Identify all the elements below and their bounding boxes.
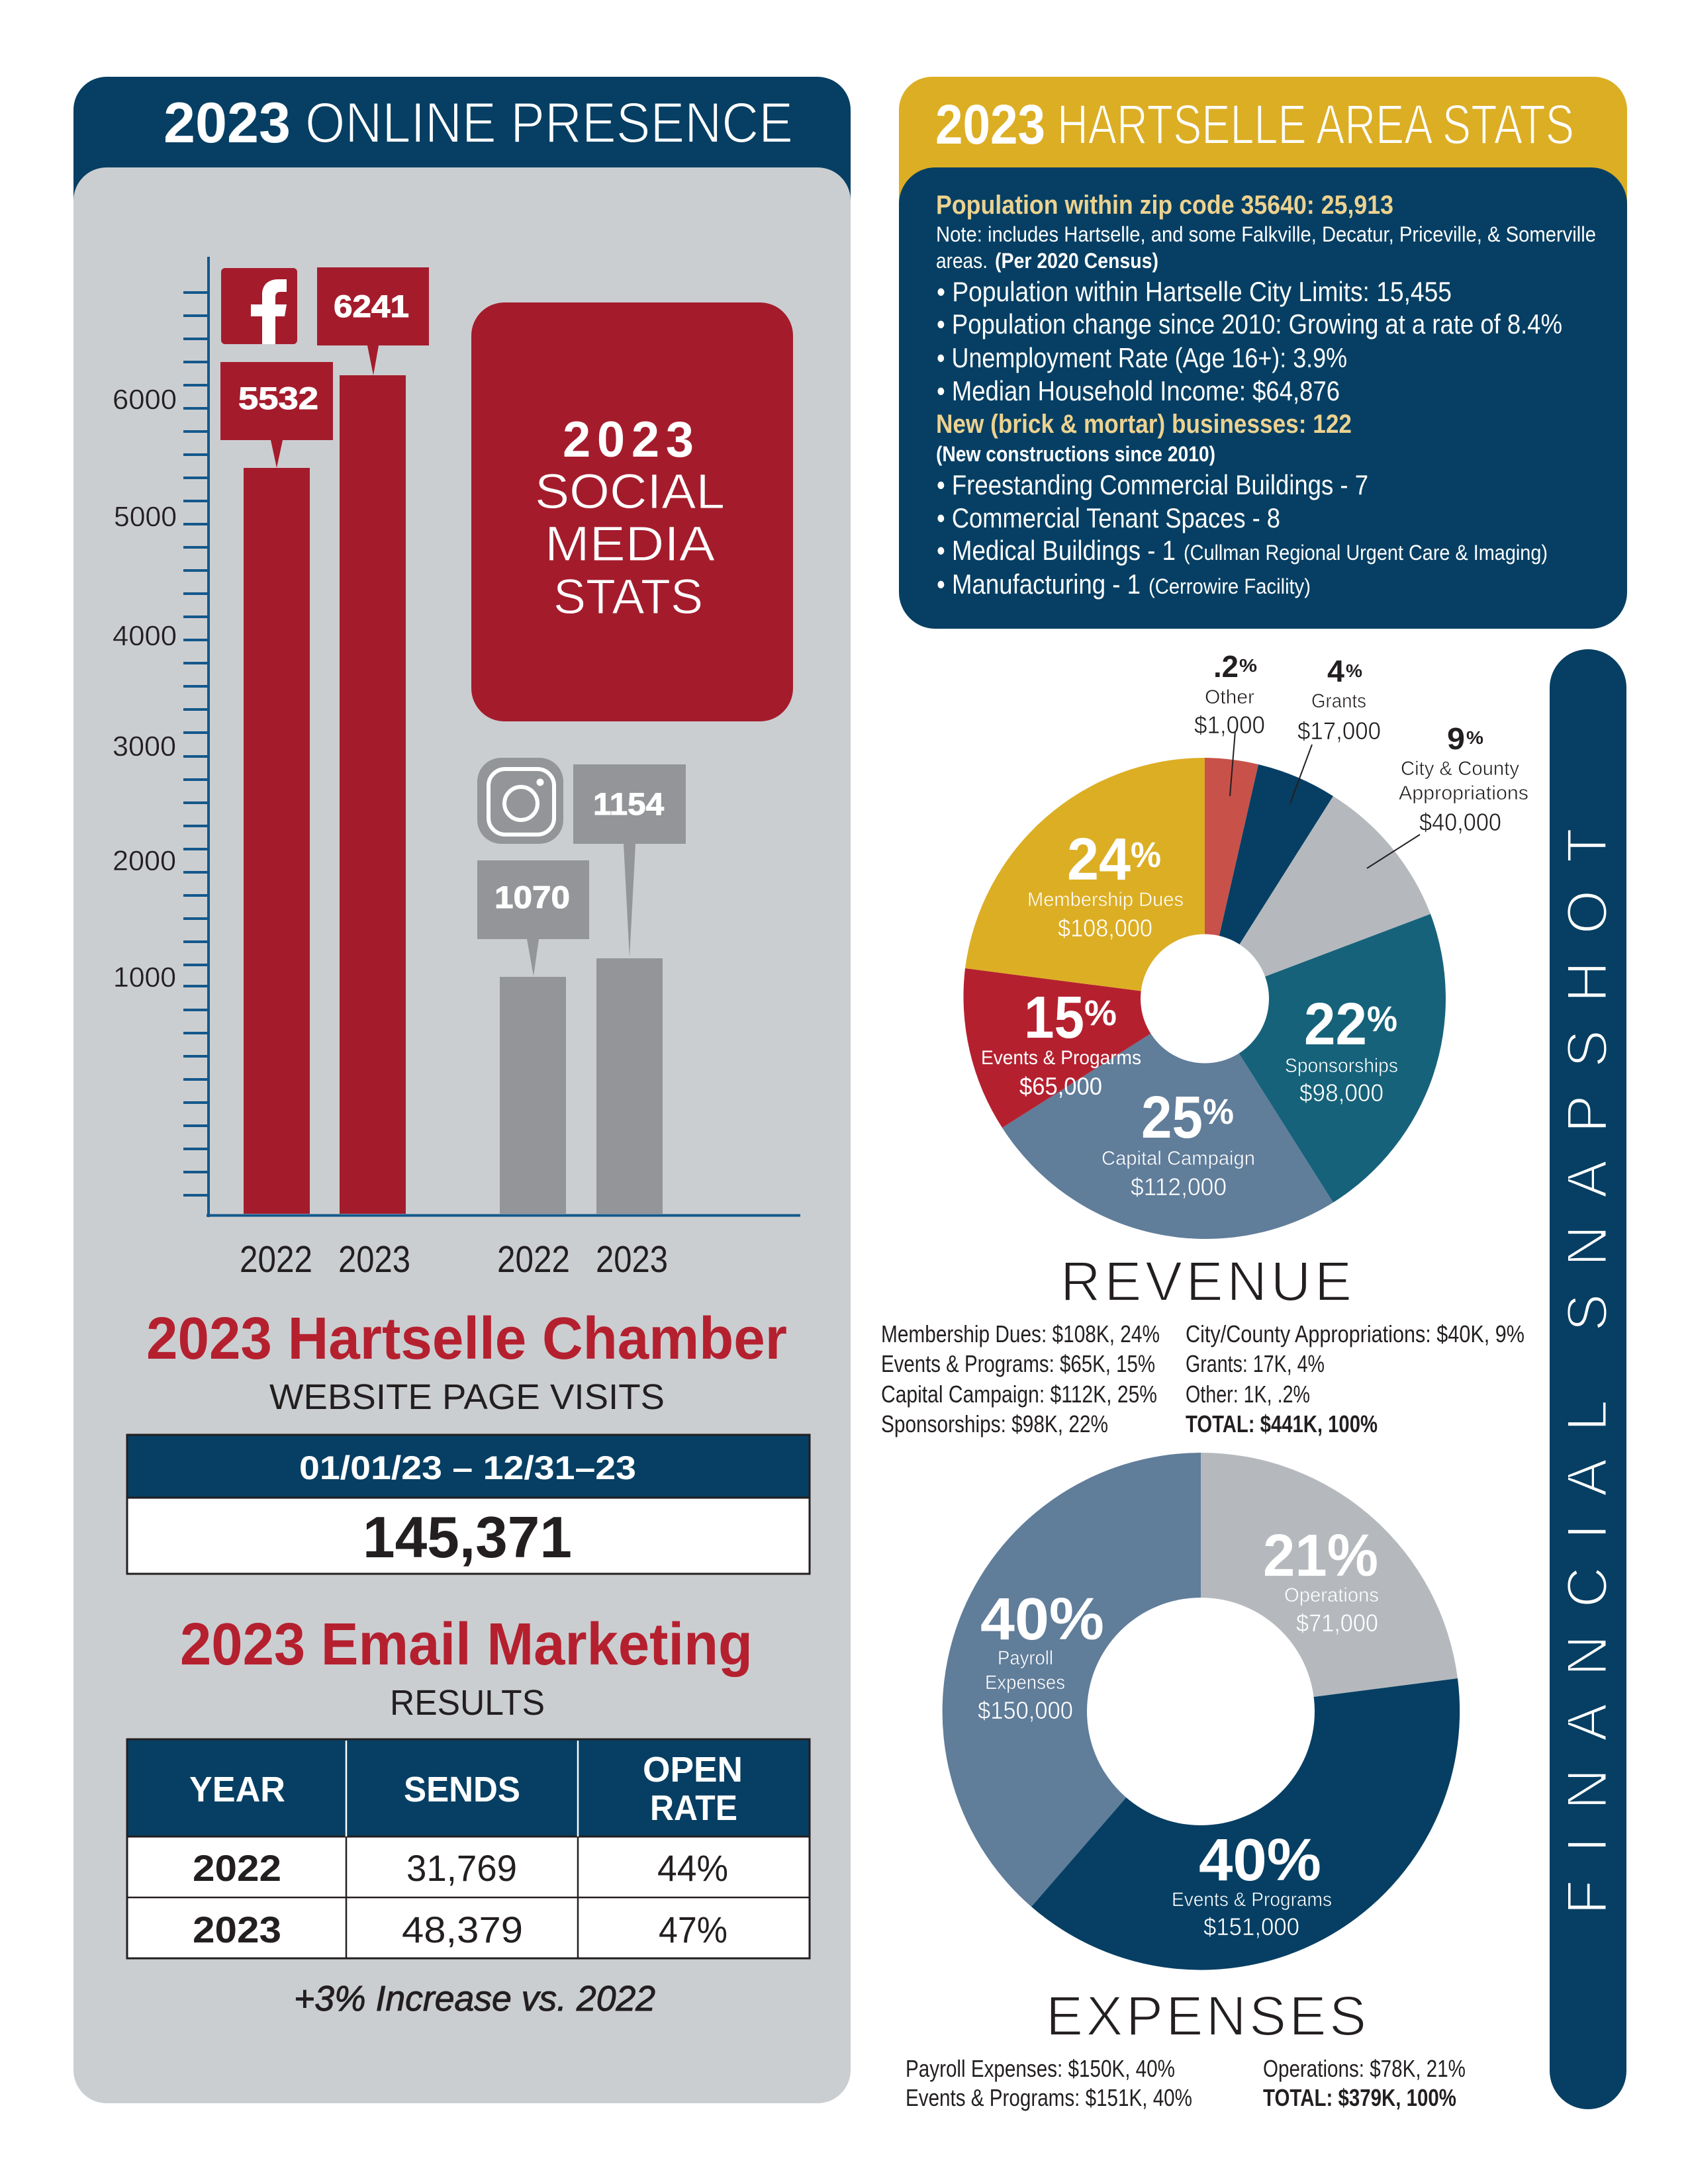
panel: hartselle area stats <box>899 77 1627 629</box>
legend: revenue: Events & Programs: $65K, 15% <box>881 1350 1155 1377</box>
title: area stats <box>935 93 1574 156</box>
title: online presence: 2023 <box>164 91 291 155</box>
legend: revenue: Membership Dues: $108K, 24% <box>881 1320 1160 1347</box>
table: email marketing results: SENDS <box>404 1770 520 1809</box>
label: events and programs: % <box>1084 993 1117 1033</box>
heading: email marketing: 2023 Email Marketing <box>180 1612 753 1678</box>
legend: expenses: Events & Programs: $151K, 40% <box>906 2084 1192 2111</box>
label: other <box>1194 649 1265 796</box>
legend: revenue: Other: 1K, .2% <box>1186 1381 1310 1408</box>
callout box: 2023 social media stats <box>471 302 793 721</box>
axis labels: 3000 <box>113 731 176 762</box>
label: capital campaign: Capital Campaign <box>1102 1148 1255 1169</box>
axis labels: 6000 <box>113 384 177 416</box>
label: capital campaign: $112,000 <box>1131 1173 1227 1201</box>
heading: website page visits <box>146 1306 787 1417</box>
label: membership dues: 24 <box>1067 827 1131 893</box>
heading: revenue: REVENUE <box>1060 1250 1352 1312</box>
text block: new businesses: • Commercial Tenant Spaces - 8 <box>937 502 1280 533</box>
callout: facebook 2023 value: 6241 <box>334 289 409 324</box>
x-axis year labels <box>240 1238 668 1281</box>
text block: population stats: • Unemployment Rate (Age 16+): 3.9% <box>937 342 1347 373</box>
heading: website page visits: 2023 Hartselle Chamber <box>146 1306 787 1372</box>
axis labels: 5000 <box>114 501 177 533</box>
label: city and county appropriations: % <box>1466 727 1483 748</box>
table: email marketing results: 2022 <box>193 1847 281 1889</box>
text block: population stats: • Population change since 2010: Growing at a rate of 8.4% <box>937 308 1562 340</box>
heading: website page visits: WEBSITE PAGE VISITS <box>269 1377 665 1417</box>
legend: revenue: Grants: 17K, 4% <box>1186 1350 1325 1377</box>
label: payroll expenses: 40% <box>980 1586 1104 1653</box>
label: sponsorships: 22 <box>1304 991 1367 1058</box>
label: grants <box>1290 654 1381 803</box>
slice: membership dues <box>965 758 1205 999</box>
callout box: 2023 social media stats: MEDIA <box>545 516 716 571</box>
panel background: online presence <box>73 167 851 2103</box>
icon: instagram <box>477 758 563 844</box>
text block: population stats <box>936 191 1596 406</box>
text block: new businesses: • Medical Buildings - 1 <box>937 535 1176 566</box>
heading: email marketing <box>180 1612 753 1723</box>
label: sponsorships <box>1285 991 1398 1107</box>
icon: facebook <box>221 268 297 344</box>
callout: facebook 2023 value <box>317 267 429 375</box>
title: area stats: 2023 <box>935 93 1045 156</box>
title: online presence: ONLINE PRESENCE <box>305 91 793 155</box>
label: other: % <box>1239 655 1257 676</box>
table: email marketing results: 2023 <box>193 1909 281 1950</box>
label: operations: Operations <box>1284 1584 1379 1606</box>
label: city and county appropriations: $40,000 <box>1419 809 1501 836</box>
label: sponsorships: % <box>1367 999 1397 1039</box>
legend: revenue <box>881 1320 1524 1437</box>
callout: instagram 2023 value: 1154 <box>593 786 664 821</box>
text block: population stats: Population within zip code 35640: 25,913 <box>936 191 1393 220</box>
table: email marketing results: RATE <box>650 1788 737 1828</box>
label: city and county appropriations <box>1367 721 1528 868</box>
text block: new businesses: New (brick & mortar) businesses: 122 <box>936 410 1352 439</box>
legend: expenses: TOTAL: $379K, 100% <box>1263 2084 1456 2111</box>
label: payroll expenses: $150,000 <box>978 1697 1073 1724</box>
chart axes and ticks <box>183 257 800 1217</box>
slice: grants <box>1205 764 1333 999</box>
text block: population stats: areas. <box>936 249 988 273</box>
bar: instagram 2023 <box>596 958 663 1214</box>
label: payroll expenses: Expenses <box>985 1672 1065 1694</box>
panel: financial snapshot side tab <box>1550 649 1626 2109</box>
callout: instagram 2022 value <box>477 860 589 976</box>
text block: new businesses: • Manufacturing - 1 <box>937 569 1141 600</box>
label: operations: 21% <box>1263 1523 1378 1589</box>
label: sponsorships: $98,000 <box>1299 1079 1383 1107</box>
table: website visits: 01/01/23 – 12/31–23 <box>299 1449 636 1486</box>
slice: city and county appropriations <box>1205 796 1430 999</box>
label: grants: $17,000 <box>1297 717 1381 745</box>
legend: revenue: TOTAL: $441K, 100% <box>1186 1410 1378 1437</box>
label: other: $1,000 <box>1194 711 1265 739</box>
slice: payroll expenses <box>943 1453 1201 1907</box>
text block: new businesses: (Cerrowire Facility) <box>1149 574 1311 598</box>
x-axis year labels: 2023 <box>338 1238 410 1281</box>
label: capital campaign: % <box>1203 1092 1234 1132</box>
axis labels: 2000 <box>113 845 176 877</box>
label: operations: $71,000 <box>1296 1610 1378 1637</box>
label: events and programs expense: Events & Programs <box>1172 1889 1332 1911</box>
callout box: 2023 social media stats: 2023 <box>563 412 694 468</box>
text block: new businesses: (New constructions since 2010) <box>936 442 1215 466</box>
slice: events and programs expense <box>1031 1678 1460 1970</box>
slice: other <box>1205 758 1258 999</box>
table: email marketing results: 48,379 <box>402 1909 523 1950</box>
table: website visits: 145,371 <box>363 1504 572 1570</box>
bar: facebook 2022 <box>244 468 310 1214</box>
label: membership dues: Membership Dues <box>1027 889 1184 911</box>
header band: area stats <box>899 77 1627 275</box>
label: operations <box>1263 1523 1379 1637</box>
label: payroll expenses: Payroll <box>998 1647 1053 1669</box>
heading: expenses: EXPENSES <box>1046 1985 1366 2047</box>
slice: sponsorships <box>1205 914 1446 1203</box>
label: events and programs: $65,000 <box>1019 1073 1102 1100</box>
text block: new businesses: (Cullman Regional Urgent Care & Imaging) <box>1184 541 1548 565</box>
label: city and county appropriations: Appropriations <box>1399 782 1528 804</box>
slice: events and programs <box>963 968 1205 1128</box>
legend: revenue: Capital Campaign: $112K, 25% <box>881 1381 1157 1408</box>
label: membership dues: $108,000 <box>1058 915 1152 942</box>
legend: expenses: Payroll Expenses: $150K, 40% <box>906 2055 1175 2082</box>
donut chart: expenses <box>943 1453 1460 1970</box>
table: email marketing results: OPEN <box>643 1750 743 1790</box>
axis labels: 4000 <box>113 620 177 652</box>
label: grants: Grants <box>1311 690 1366 712</box>
text block: population stats: Note: includes Hartselle, and some Falkville, Decatur, Priceville, & Somerville <box>936 222 1596 246</box>
x-axis year labels: 2023 <box>596 1238 668 1281</box>
bar: facebook 2023 <box>340 375 406 1214</box>
label: grants: % <box>1346 660 1362 681</box>
panel: financial snapshot side tab: FINANCIAL SNAPSHOT <box>1556 828 1619 1915</box>
label: capital campaign <box>1102 1085 1255 1201</box>
label: events and programs <box>981 985 1141 1100</box>
heading: email marketing: RESULTS <box>390 1683 545 1723</box>
pie chart: revenue <box>963 649 1528 1239</box>
table: email marketing results: 31,769 <box>406 1847 517 1889</box>
table: email marketing results: 44% <box>657 1847 728 1889</box>
text block: new businesses <box>936 410 1548 600</box>
table: email marketing results: YEAR <box>189 1770 285 1809</box>
bar: instagram 2022 <box>500 977 566 1214</box>
label: membership dues: % <box>1131 835 1161 875</box>
note: increase versus 2022: +3% Increase vs. 2022 <box>294 1979 655 2019</box>
label: grants: 4 <box>1327 654 1344 688</box>
table: email marketing results: 47% <box>659 1909 727 1950</box>
text block: population stats: (Per 2020 Census) <box>995 249 1158 273</box>
label: capital campaign: 25 <box>1141 1085 1203 1151</box>
label: events and programs expense: $151,000 <box>1203 1913 1299 1940</box>
x-axis year labels: 2022 <box>497 1238 570 1281</box>
label: events and programs expense <box>1172 1827 1332 1940</box>
legend: revenue: Sponsorships: $98K, 22% <box>881 1410 1108 1437</box>
label: membership dues <box>1027 827 1184 942</box>
label: city and county appropriations: 9 <box>1447 721 1465 756</box>
panel background: area stats <box>899 167 1627 629</box>
legend: expenses: Operations: $78K, 21% <box>1263 2055 1466 2082</box>
callout box: 2023 social media stats: STATS <box>553 569 703 624</box>
callout: instagram 2022 value: 1070 <box>494 880 570 915</box>
panel: online presence <box>73 77 851 2103</box>
legend: expenses <box>906 2055 1466 2111</box>
legend: revenue: City/County Appropriations: $40K, 9% <box>1186 1320 1524 1347</box>
axis labels <box>113 384 177 993</box>
header band: online presence <box>73 77 851 275</box>
label: events and programs: Events & Progarms <box>981 1047 1141 1069</box>
label: other: Other <box>1205 686 1254 708</box>
bar chart: social media <box>113 257 800 1281</box>
label: other: .2 <box>1213 649 1239 684</box>
callout: facebook 2022 value <box>220 362 333 468</box>
slice: operations <box>1201 1453 1458 1711</box>
text block: new businesses: • Freestanding Commercial Buildings - 7 <box>937 469 1368 500</box>
donut center hole <box>1087 1598 1315 1825</box>
axis labels: 1000 <box>113 962 176 993</box>
label: sponsorships: Sponsorships <box>1285 1055 1398 1077</box>
label: events and programs: 15 <box>1024 985 1084 1051</box>
callout box: 2023 social media stats: SOCIAL <box>535 464 725 519</box>
text block: population stats: • Median Household Income: $64,876 <box>937 375 1340 406</box>
table: email marketing results <box>127 1739 810 1958</box>
callout: facebook 2022 value: 5532 <box>238 381 318 416</box>
text block: population stats: • Population within Hartselle City Limits: 15,455 <box>937 276 1452 307</box>
label: payroll expenses <box>978 1586 1104 1724</box>
label: city and county appropriations: City & County <box>1401 758 1519 780</box>
slice: capital campaign <box>1002 999 1333 1239</box>
label: events and programs expense: 40% <box>1199 1827 1321 1893</box>
callout: instagram 2023 value <box>573 764 686 958</box>
pie center hole <box>1141 934 1269 1063</box>
x-axis year labels: 2022 <box>240 1238 312 1281</box>
table: website visits <box>127 1435 810 1574</box>
